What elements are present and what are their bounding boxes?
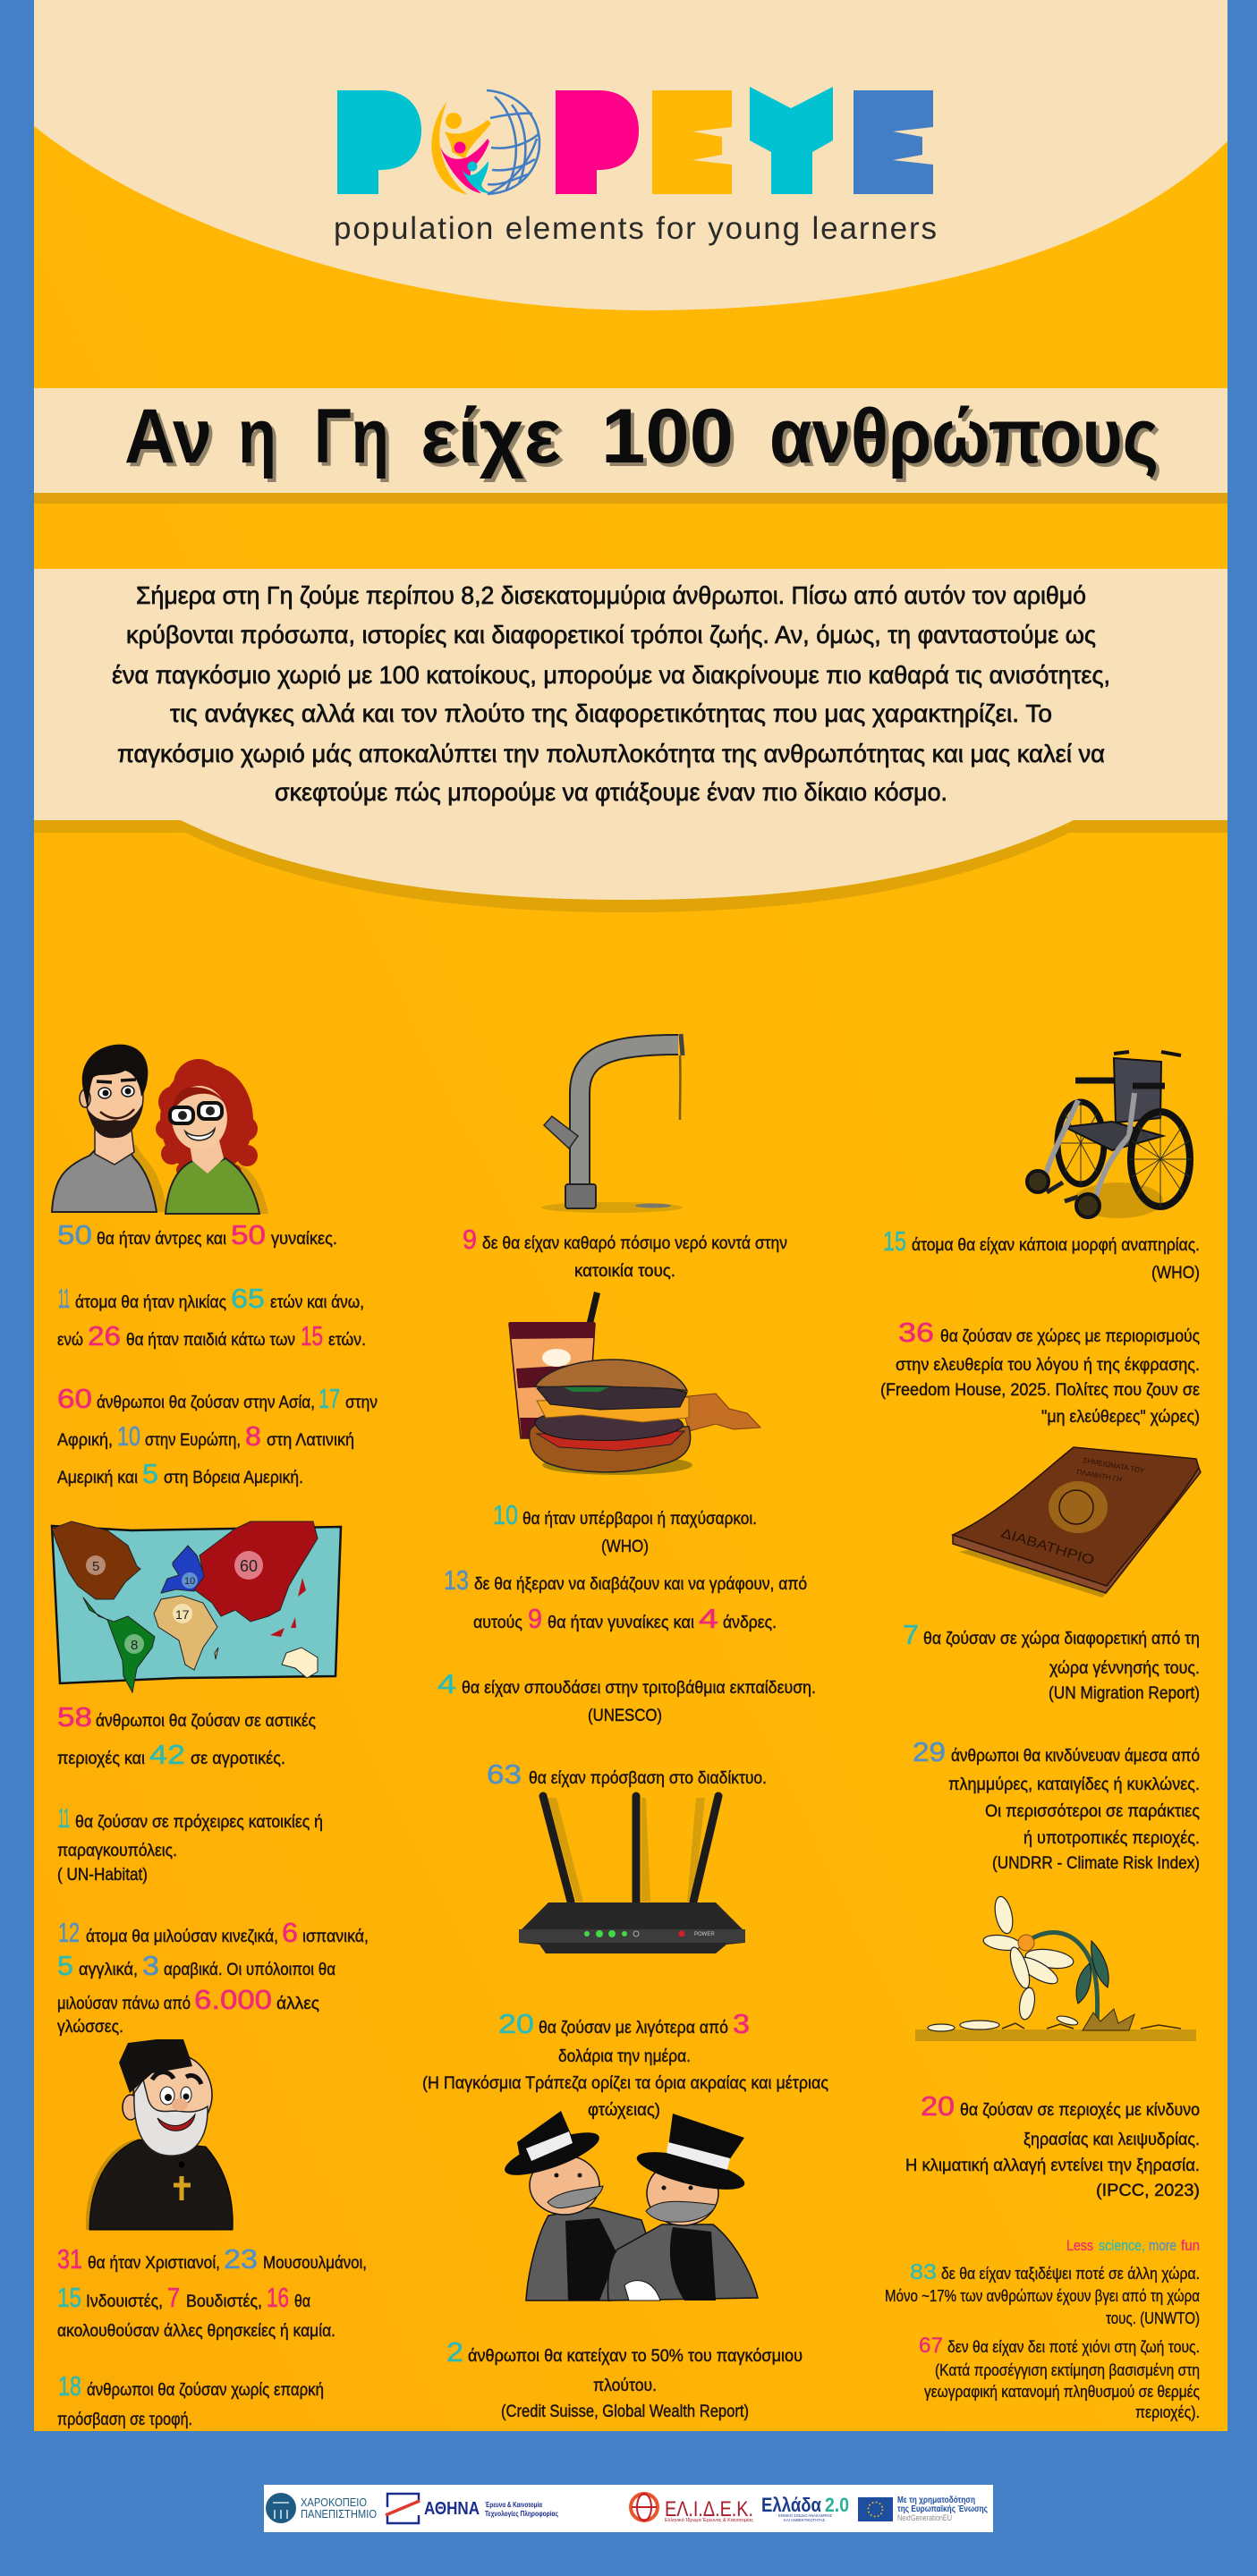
- fact: slums: ( UN-Habitat): [57, 1865, 148, 1885]
- fact: continents: Αφρική,: [57, 1430, 113, 1450]
- title band: [34, 388, 1227, 493]
- fact: tertiary education: θα είχαν σπουδάσει στην τριτοβάθμια εκπαίδευση.: [462, 1678, 816, 1698]
- fact: snow: δεν θα είχαν δει ποτέ χιόνι στη ζωή τους.: [947, 2338, 1200, 2356]
- fact: drought: [905, 2090, 1200, 2200]
- fact: urban and rural: σε αγροτικές.: [191, 1749, 285, 1768]
- fact: freedom of speech: "μη ελεύθερες" χώρες): [1041, 1407, 1200, 1427]
- fact: climate disasters: πλημμύρες, καταιγίδες ή κυκλώνες.: [948, 1775, 1200, 1794]
- fact: religion: θα: [294, 2292, 310, 2311]
- icon: globe with three figures: [431, 90, 539, 194]
- fact: climate disasters: άνθρωποι θα κινδύνευαν άμεσα από: [951, 1746, 1200, 1766]
- fact: languages: αραβικά. Οι υπόλοιποι θα: [164, 1960, 335, 1979]
- fact: languages: 5: [57, 1950, 73, 1981]
- fact: internet: 63: [487, 1758, 522, 1790]
- illustration: passport: ΠΛΑΝΗΤΗ ΓΗ: [1076, 1468, 1123, 1484]
- logo: Greece 2.0: ΕΘΝΙΚΟ ΣΧΕΔΙΟ ΑΝΑΚΑΜΨΗΣ: [778, 2513, 832, 2518]
- logo: ELIDEK: ΕΛ.Ι.Δ.Ε.Κ.: [665, 2497, 753, 2521]
- logo: Athena Research: [386, 2494, 558, 2523]
- fact: continents: 8: [245, 1420, 261, 1452]
- illustration: passport: ΣΗΜΕΙΩΜΑΤΑ ΤΟΥ: [1083, 1456, 1145, 1475]
- fact: age: 26: [88, 1320, 121, 1352]
- logo: Greece 2.0: 2.0: [825, 2494, 849, 2516]
- fact: urban and rural: [57, 1701, 316, 1770]
- fact: clean water: 9: [463, 1224, 477, 1255]
- fact: continents: [57, 1383, 378, 1489]
- fact: climate disasters: Οι περισσότεροι σε παράκτιες: [985, 1801, 1200, 1821]
- fact: urban and rural: 42: [149, 1739, 185, 1770]
- fact: freedom of speech: (Freedom House, 2025. Πολίτες που ζουν σε: [880, 1380, 1200, 1400]
- fact: poverty: φτώχειας): [588, 2100, 660, 2120]
- fact: age: ετών.: [328, 1330, 366, 1350]
- intro panel: [34, 569, 1227, 900]
- fact: religion: ακολουθούσαν άλλες θρησκείες ή καμία.: [57, 2321, 335, 2341]
- logo: Athena Research: Τεχνολογίες Πληροφορίας: [485, 2510, 558, 2518]
- logo: EU NextGenerationEU: NextGenerationEU: [897, 2513, 952, 2522]
- fact: religion: 23: [224, 2243, 258, 2275]
- fact: languages: άλλες: [276, 1994, 319, 2013]
- logo: Athena Research: Έρευνα & Καινοτομία: [485, 2501, 542, 2509]
- fact: poverty: (Η Παγκόσμια Τράπεζα ορίζει τα όρια ακραίας και μέτριας: [422, 2073, 828, 2093]
- fact: religion: 16: [267, 2282, 289, 2313]
- column: right facts: [880, 1052, 1201, 2421]
- fact: age: ετών και άνω,: [270, 1292, 364, 1312]
- intro panel shadow: [34, 820, 1227, 912]
- fact: continents: 60: [57, 1383, 92, 1414]
- fact: age: ενώ: [57, 1330, 83, 1350]
- fact: travel: τους. (UNWTO): [1106, 2309, 1200, 2327]
- fact: tertiary education: [437, 1668, 816, 1725]
- illustration: wilted flower: [915, 1895, 1196, 2041]
- column: left facts: [52, 1045, 378, 2429]
- logo: ELIDEK: Ελληνικό Ίδρυμα Έρευνας & Καινοτομίας: [665, 2517, 753, 2523]
- fact: food: [57, 2370, 324, 2429]
- fact: religion: Μουσουλμάνοι,: [263, 2253, 367, 2273]
- tagline: population elements for young learners: [334, 211, 937, 246]
- fact: migration: 7: [903, 1619, 919, 1650]
- illustration: world map: 17: [175, 1607, 190, 1622]
- fact: religion: 31: [57, 2243, 82, 2275]
- fact: literacy: 9: [528, 1603, 542, 1634]
- fact: literacy: θα ήταν γυναίκες και: [548, 1613, 694, 1632]
- intro text: σκεφτούμε πώς μπορούμε να φτιάξουμε έναν πιο δίκαιο κόσμο.: [275, 778, 947, 806]
- fact: urban and rural: περιοχές και: [57, 1749, 145, 1768]
- fact: disability: (WHO): [1151, 1263, 1200, 1283]
- fact: languages: [57, 1917, 369, 2037]
- fact: languages: μιλούσαν πάνω από: [57, 1994, 191, 2013]
- fact: travel: [885, 2260, 1200, 2327]
- illustration: passport: [953, 1447, 1201, 1597]
- fact: religion: [57, 2243, 367, 2341]
- fact: age: [57, 1283, 366, 1352]
- fact: religion: 7: [167, 2282, 180, 2313]
- fact: languages: 6: [282, 1917, 298, 1948]
- fact: migration: (UN Migration Report): [1049, 1683, 1200, 1703]
- fact: snow: 67: [919, 2334, 943, 2358]
- fact: literacy: δε θα ήξεραν να διαβάζουν και να γράφουν, από: [474, 1574, 807, 1594]
- fact: clean water: δε θα είχαν καθαρό πόσιμο νερό κοντά στην: [482, 1233, 787, 1253]
- fact: drought: (IPCC, 2023): [1096, 2181, 1200, 2200]
- fact: climate disasters: 29: [913, 1736, 946, 1767]
- fact: urban and rural: 58: [57, 1701, 92, 1733]
- fact: disability: [883, 1225, 1200, 1283]
- logo: EU NextGenerationEU: της Ευρωπαϊκής Ένωσης: [897, 2504, 988, 2514]
- heading: less science, more fun: Less: [1066, 2237, 1093, 2254]
- fact: wealth: [446, 2336, 803, 2421]
- fact: age: 11: [58, 1283, 70, 1314]
- fact: poverty: δολάρια την ημέρα.: [558, 2046, 691, 2066]
- fact: slums: [57, 1802, 323, 1885]
- fact: snow: περιοχές).: [1135, 2403, 1200, 2421]
- illustration: dripping faucet: [541, 1034, 683, 1213]
- fact: climate disasters: (UNDRR - Climate Risk Index): [992, 1853, 1200, 1873]
- fact: literacy: 13: [444, 1564, 469, 1596]
- fact: continents: άνθρωποι θα ζούσαν στην Ασία,: [97, 1393, 315, 1412]
- fact: religion: θα ήταν Χριστιανοί,: [88, 2253, 220, 2273]
- fact: wealth: (Credit Suisse, Global Wealth Report): [501, 2402, 749, 2421]
- fact: obesity: (WHO): [601, 1537, 649, 1556]
- fact: migration: θα ζούσαν σε χώρα διαφορετική από τη: [923, 1629, 1200, 1648]
- logo: Athena Research: ΑΘΗΝΑ: [424, 2499, 480, 2519]
- title: είχε: [420, 394, 561, 479]
- fact: tertiary education: (UNESCO): [588, 1706, 662, 1725]
- fact: continents: στην Ευρώπη,: [145, 1430, 241, 1450]
- fact: food: πρόσβαση σε τροφή.: [57, 2410, 192, 2429]
- title band shadow: [34, 493, 1227, 504]
- logo: Greece 2.0: [761, 2494, 849, 2522]
- illustration: two rich men with top hats: [500, 2111, 758, 2301]
- logo: Harokopio University: [266, 2493, 377, 2523]
- fact: drought: ξηρασίας και λειψυδρίας.: [1023, 2130, 1200, 2149]
- fact: travel: 83: [910, 2260, 937, 2284]
- fact: age: 15: [301, 1320, 323, 1352]
- logo: POPEYE: [334, 87, 937, 246]
- fact: religion: Ινδουιστές,: [86, 2292, 163, 2311]
- fact: urban and rural: άνθρωποι θα ζούσαν σε αστικές: [96, 1711, 316, 1731]
- illustration: world map: 8: [131, 1638, 138, 1653]
- fact: obesity: θα ήταν υπέρβαροι ή παχύσαρκοι.: [522, 1509, 757, 1529]
- title: Γη: [314, 394, 389, 479]
- illustration: burger, drink and fries: [509, 1292, 760, 1475]
- logo: EU NextGenerationEU: Με τη χρηματοδότηση: [897, 2496, 975, 2505]
- logo: Harokopio University: ΧΑΡΟΚΟΠΕΙΟ: [301, 2496, 367, 2509]
- fact: climate disasters: [913, 1736, 1200, 1873]
- intro text: τις ανάγκες αλλά και τον πλούτο της διαφορετικότητας που μας χαρακτηρίζει. Το: [170, 699, 1052, 727]
- intro text: παγκόσμιο χωριό μάς αποκαλύπτει την πολυπλοκότητα της ανθρωπότητας και μας καλεί να: [117, 740, 1105, 767]
- fact: slums: 11: [58, 1802, 70, 1834]
- logo: Greece 2.0: ΚΑΙ ΑΝΘΕΚΤΙΚΟΤΗΤΑΣ: [784, 2518, 825, 2522]
- fact: freedom of speech: 36: [898, 1317, 934, 1348]
- fact: literacy: αυτούς: [473, 1613, 522, 1632]
- title: ανθρώπους: [769, 394, 1159, 479]
- fact: migration: [903, 1619, 1200, 1703]
- fact: drought: Η κλιματική αλλαγή εντείνει την ξηρασία.: [905, 2156, 1200, 2175]
- fact: freedom of speech: στην ελευθερία του λόγου ή της έκφρασης.: [896, 1355, 1200, 1375]
- fact: languages: αγγλικά,: [79, 1960, 138, 1979]
- intro text: κρύβονται πρόσωπα, ιστορίες και διαφορετικοί τρόποι ζωής. Αν, όμως, τη φανταστούμε ως: [126, 621, 1096, 648]
- illustration: wifi router: [519, 1796, 745, 1953]
- heading: less science, more fun: fun: [1181, 2237, 1200, 2254]
- title: η: [238, 394, 276, 479]
- top cream arc: [34, 0, 1227, 310]
- fact: continents: 5: [142, 1458, 158, 1489]
- fact: languages: άτομα θα μιλούσαν κινεζικά,: [86, 1927, 278, 1946]
- fact: tertiary education: 4: [437, 1668, 456, 1699]
- fact: men and women: 50: [231, 1219, 266, 1250]
- fact: travel: δε θα είχαν ταξιδέψει ποτέ σε άλλη χώρα.: [941, 2265, 1200, 2283]
- title: Αν: [124, 394, 212, 479]
- fact: climate disasters: ή υποτροπικές περιοχές.: [1023, 1828, 1200, 1848]
- fact: literacy: άνδρες.: [723, 1613, 777, 1632]
- fact: poverty: 3: [733, 2008, 750, 2039]
- fact: travel: Μόνο ~17% των ανθρώπων έχουν βγει από τη χώρα: [885, 2287, 1200, 2305]
- fact: internet: [487, 1758, 767, 1790]
- illustration: man and woman: [52, 1045, 268, 1214]
- illustration: wheelchair: [1027, 1052, 1192, 1218]
- fact: clean water: [463, 1224, 787, 1281]
- fact: continents: στη Λατινική: [267, 1430, 354, 1450]
- fact: continents: 10: [117, 1420, 140, 1452]
- illustration: world map: 10: [184, 1576, 195, 1587]
- illustration: world map: [52, 1521, 341, 1692]
- fact: drought: θα ζούσαν σε περιοχές με κίνδυνο: [960, 2100, 1200, 2120]
- fact: snow: (Κατά προσέγγιση εκτίμηση βασισμένη στη: [935, 2361, 1200, 2379]
- heading: less science, more fun: [1066, 2237, 1200, 2254]
- fact: snow: γεωγραφική κατανομή πληθυσμού σε θερμές: [924, 2383, 1200, 2401]
- fact: wealth: 2: [446, 2336, 463, 2368]
- intro text: Σήμερα στη Γη ζούμε περίπου 8,2 δισεκατομμύρια άνθρωποι. Πίσω από αυτόν τον αριθμό: [136, 581, 1086, 609]
- fact: wealth: πλούτου.: [593, 2376, 657, 2395]
- fact: languages: 12: [58, 1917, 80, 1948]
- fact: poverty: θα ζούσαν με λιγότερα από: [539, 2018, 728, 2038]
- logo: Harokopio University: ΠΑΝΕΠΙΣΤΗΜΙΟ: [301, 2507, 377, 2521]
- illustration: priest: [86, 2039, 233, 2230]
- logo: Greece 2.0: Ελλάδα: [761, 2494, 821, 2516]
- fact: disability: άτομα θα είχαν κάποια μορφή αναπηρίας.: [912, 1235, 1200, 1255]
- fact: religion: 15: [57, 2282, 81, 2313]
- fact: religion: Βουδιστές,: [186, 2292, 262, 2311]
- footer: partner logos: [264, 2485, 993, 2532]
- fact: men and women: θα ήταν άντρες και: [97, 1229, 226, 1249]
- fact: men and women: γυναίκες.: [271, 1229, 337, 1249]
- illustration: passport: ΔΙΑΒΑΤΗΡΙΟ: [999, 1526, 1096, 1568]
- fact: poverty: [422, 2008, 828, 2120]
- fact: wealth: άνθρωποι θα κατείχαν το 50% του παγκόσμιου: [468, 2346, 803, 2366]
- fact: age: άτομα θα ήταν ηλικίας: [75, 1292, 226, 1312]
- fact: literacy: [444, 1564, 807, 1634]
- fact: men and women: [57, 1219, 337, 1250]
- intro text: [112, 581, 1110, 806]
- heading: less science, more fun: science,: [1099, 2237, 1145, 2254]
- fact: disability: 15: [883, 1225, 906, 1257]
- fact: obesity: 10: [493, 1499, 518, 1530]
- fact: languages: 6.000: [194, 1984, 272, 2015]
- fact: food: άνθρωποι θα ζούσαν χωρίς επαρκή: [87, 2380, 324, 2400]
- fact: languages: 3: [142, 1950, 159, 1981]
- fact: continents: Αμερική και: [57, 1468, 138, 1487]
- fact: continents: στη Βόρεια Αμερική.: [164, 1468, 303, 1487]
- fact: freedom of speech: [880, 1317, 1200, 1427]
- fact: men and women: 50: [57, 1219, 92, 1250]
- fact: poverty: 20: [498, 2008, 534, 2039]
- title: 100: [601, 394, 734, 479]
- fact: snow: [919, 2334, 1200, 2421]
- logo: ELIDEK: [631, 2494, 753, 2523]
- fact: age: θα ήταν παιδιά κάτω των: [126, 1330, 295, 1350]
- title: [124, 394, 1159, 479]
- fact: clean water: κατοικία τους.: [574, 1261, 675, 1281]
- column: middle facts: [422, 1034, 828, 2421]
- fact: age: 65: [231, 1283, 265, 1314]
- fact: freedom of speech: θα ζούσαν σε χώρες με περιορισμούς: [940, 1326, 1200, 1346]
- fact: slums: θα ζούσαν σε πρόχειρες κατοικίες ή: [75, 1812, 323, 1832]
- illustration: world map: 60: [240, 1557, 258, 1575]
- fact: drought: 20: [921, 2090, 955, 2122]
- fact: languages: ισπανικά,: [302, 1927, 369, 1946]
- heading: less science, more fun: more: [1149, 2237, 1176, 2254]
- logo: EU NextGenerationEU: [858, 2496, 988, 2522]
- fact: food: 18: [58, 2370, 81, 2402]
- fact: literacy: 4: [699, 1603, 718, 1634]
- fact: slums: παραγκουπόλεις.: [57, 1841, 177, 1860]
- illustration: wifi router: POWER: [694, 1932, 715, 1937]
- fact: internet: θα είχαν πρόσβαση στο διαδίκτυο.: [529, 1768, 767, 1788]
- fact: obesity: [493, 1499, 757, 1556]
- fact: continents: στην: [345, 1393, 378, 1412]
- illustration: world map: 5: [92, 1559, 99, 1574]
- intro text: ένα παγκόσμιο χωριό με 100 κατοίκους, μπορούμε να διακρίνουμε πιο καθαρά τις ανισότητες,: [112, 661, 1110, 689]
- fact: migration: χώρα γέννησής τους.: [1049, 1658, 1200, 1678]
- fact: languages: γλώσσες.: [57, 2017, 123, 2037]
- fact: continents: 17: [318, 1383, 340, 1414]
